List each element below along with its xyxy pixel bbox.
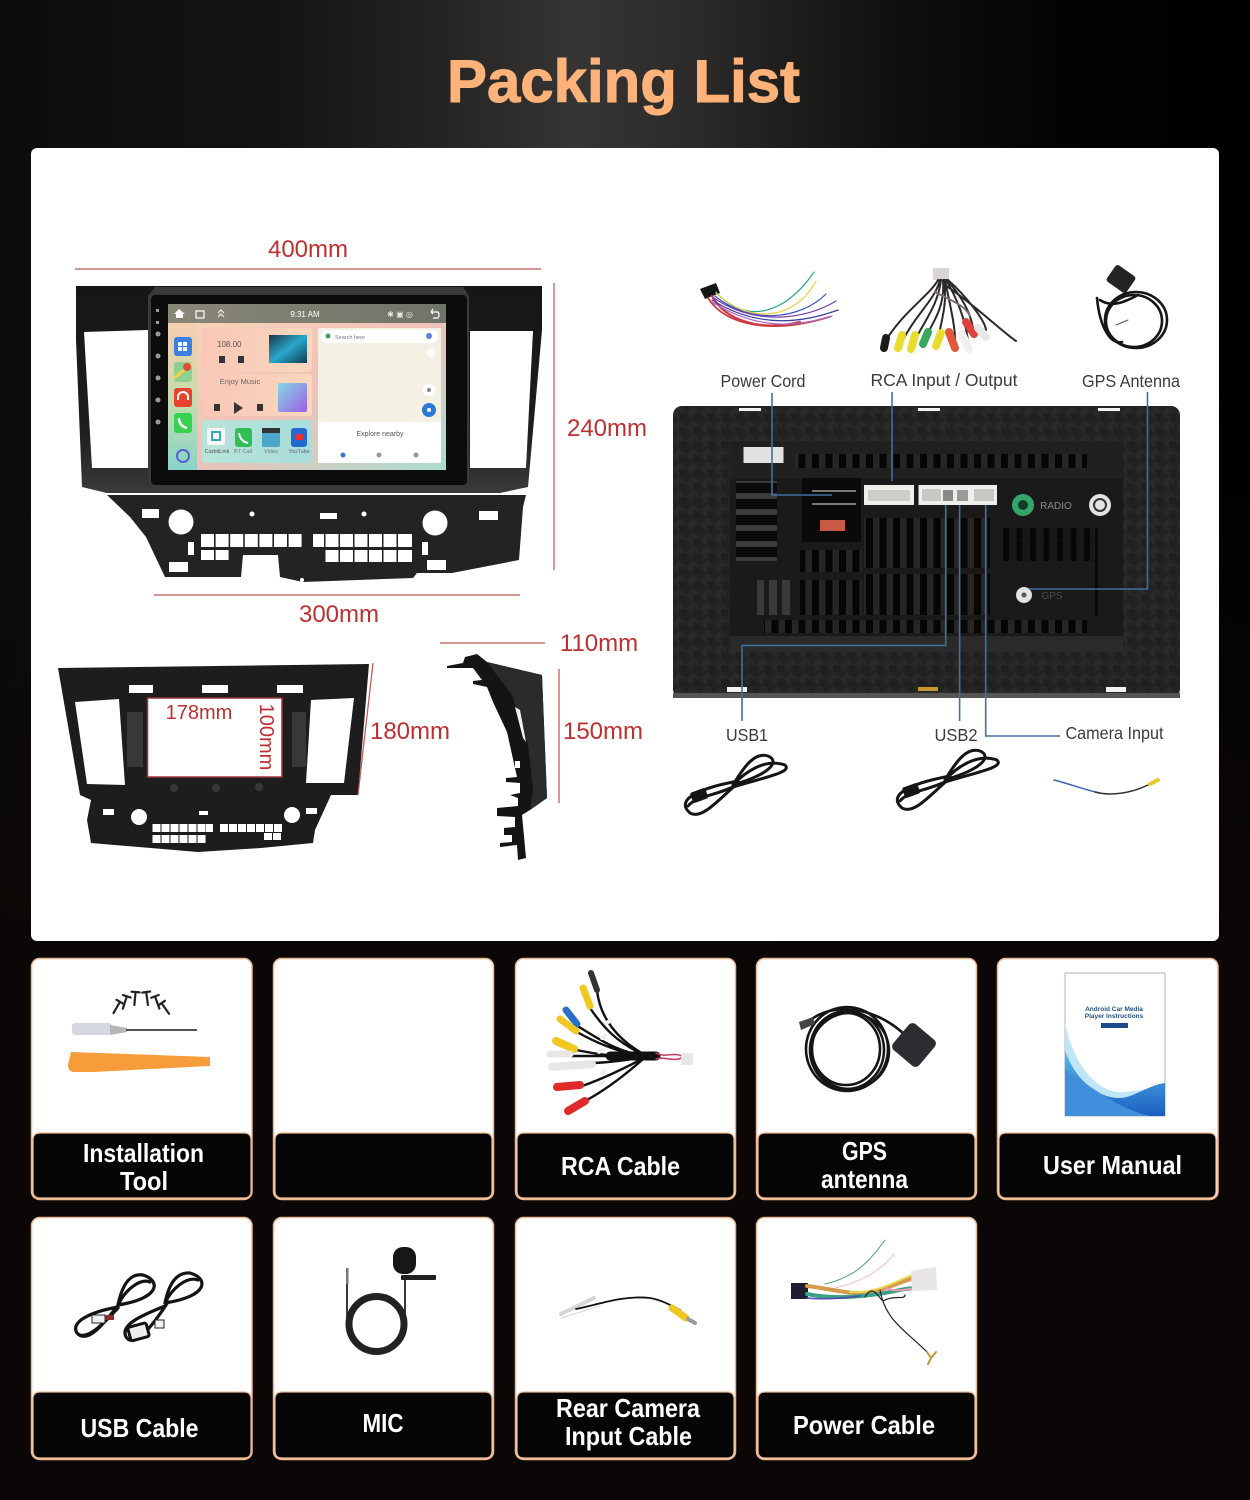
card: USB Cable <box>32 1218 252 1460</box>
wiring connector block <box>802 478 861 542</box>
dash trim frame <box>76 286 542 493</box>
frame slots <box>727 408 1126 692</box>
card: unlabeled blank <box>274 958 494 1200</box>
apps card <box>202 420 312 463</box>
card: Rear Camera Input Cable <box>516 1218 736 1460</box>
head unit front view <box>76 286 542 582</box>
frame mounting bosses <box>127 712 306 792</box>
icon: USB cables <box>76 1273 202 1341</box>
display bezel <box>148 287 469 489</box>
dimension: 150mm: 150mm <box>563 718 643 745</box>
RCA port <box>864 485 914 505</box>
card: MIC <box>274 1218 494 1460</box>
connection labels: GPS Antenna <box>1082 371 1180 391</box>
card: Installation Tool: Tool <box>120 1166 168 1196</box>
label: MIC <box>362 1408 404 1438</box>
app icons <box>174 337 192 462</box>
dimension: 240mm: 240mm <box>567 415 647 442</box>
connection labels <box>720 370 1180 745</box>
card: User Manual <box>998 958 1218 1200</box>
icon: orange pry tool <box>68 1052 210 1072</box>
icon: camera cable <box>561 1297 695 1323</box>
icon: screwdriver <box>72 1023 197 1035</box>
GPS socket: GPS <box>1041 591 1063 602</box>
title: Packing List <box>447 48 800 115</box>
icon: power harness <box>791 1240 937 1364</box>
icon: manual booklet <box>1065 973 1165 1116</box>
dimension: 400mm: 400mm <box>268 236 348 263</box>
icon: screws <box>110 992 172 1016</box>
radio frame rear view <box>58 664 369 852</box>
side buttons <box>156 309 160 424</box>
bracket cut-outs <box>142 509 498 582</box>
label: Power Cable <box>793 1410 935 1440</box>
connection labels: RCA Input / Output <box>870 370 1018 390</box>
dimension: 180mm <box>358 663 450 795</box>
radio antenna socket: RADIO <box>1040 501 1072 512</box>
radio frame rear view: 100mm <box>255 704 277 770</box>
icon: GPS antenna <box>799 1007 938 1091</box>
connection labels: USB1 <box>726 725 768 745</box>
dimension: 300mm: 300mm <box>299 601 379 628</box>
status bar: 9:31 AM <box>290 310 320 319</box>
touch screen <box>168 304 446 470</box>
label: RCA Cable <box>561 1151 680 1181</box>
icon: lapel microphone <box>346 1247 436 1352</box>
GPS socket <box>1016 587 1063 603</box>
card: GPS antenna <box>756 958 976 1200</box>
icon: manual booklet: Android Car Media <box>1085 1006 1143 1013</box>
map card <box>318 328 441 463</box>
panel: dimensions and connections <box>31 148 1219 941</box>
head unit rear view <box>673 392 1180 736</box>
apps card: Video <box>264 449 278 455</box>
map card: Search here <box>335 335 365 341</box>
card: Installation Tool <box>32 958 252 1200</box>
accessory: power cord <box>700 272 838 326</box>
apps card: CarbitLink <box>205 449 230 455</box>
icon: manual booklet: Player Instructions <box>1085 1013 1144 1020</box>
connection labels: Power Cord <box>720 371 806 391</box>
frame openings <box>75 685 354 843</box>
label: Installation <box>83 1138 204 1168</box>
icon: RCA cable bundle <box>550 973 693 1111</box>
card: Rear Camera Input Cable: Input Cable <box>565 1421 692 1451</box>
music card <box>202 374 312 416</box>
inner cut-out with red outline <box>148 698 282 777</box>
card: Power Cable <box>756 1218 976 1460</box>
card: GPS antenna: antenna <box>821 1164 908 1194</box>
serial sticker <box>744 447 784 463</box>
USB and camera ports <box>918 485 997 505</box>
accessory: camera cable <box>1054 780 1158 794</box>
label: Rear Camera <box>556 1393 700 1423</box>
dimension: 110mm: 110mm <box>560 630 638 657</box>
connection labels: USB2 <box>934 725 978 745</box>
chassis <box>730 441 1123 652</box>
apps card: YouTube <box>288 449 310 455</box>
radio frame rear view: 178mm <box>166 702 232 724</box>
map card: Explore nearby <box>356 431 404 438</box>
connection labels: Camera Input <box>1066 723 1164 743</box>
accessory: USB1 cable <box>685 755 786 814</box>
dimension: 180mm: 180mm <box>370 718 450 745</box>
mounting badge <box>1089 494 1111 516</box>
radio antenna socket <box>1012 494 1072 516</box>
radio card: 108.00 <box>217 340 242 349</box>
side profile of frame <box>447 654 547 860</box>
accessory: GPS antenna <box>1097 264 1167 348</box>
accessory: RCA harness <box>884 268 1016 349</box>
label: User Manual <box>1043 1150 1182 1180</box>
radio card <box>202 328 312 372</box>
apps card: BT Call <box>234 449 252 455</box>
leader lines <box>742 392 1148 736</box>
lower bracket <box>107 495 526 582</box>
card: RCA Cable <box>516 958 736 1200</box>
dimension: 150mm <box>559 669 643 803</box>
accessory: USB2 cable <box>897 750 998 809</box>
label: USB Cable <box>80 1413 198 1443</box>
music card: Enjoy Music <box>220 377 260 386</box>
label: GPS <box>842 1136 887 1166</box>
status bar: ✱ ▣ ◎ <box>387 310 413 319</box>
status bar <box>168 304 446 323</box>
